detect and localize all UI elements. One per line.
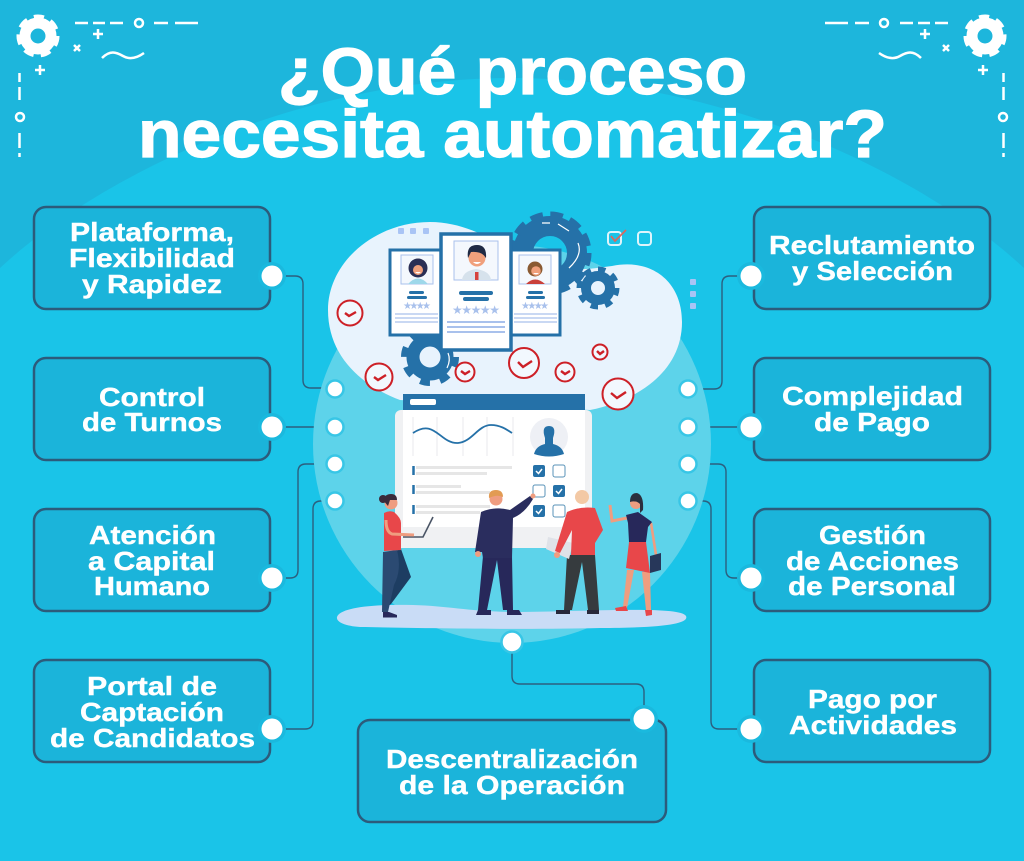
panel: Gestión de Acciones de Personal: Gestión	[819, 520, 926, 550]
profile card: left: ★★★★	[403, 301, 431, 312]
icon: medium gear	[579, 269, 617, 307]
panel: Reclutamiento y Selección: y Selección	[792, 256, 953, 286]
illustration blob	[328, 222, 682, 410]
panel: Atención a Capital Humano: Atención	[89, 520, 216, 550]
person: man in red sweater	[546, 490, 603, 614]
panel: Control de Turnos: Control	[99, 382, 205, 412]
title: ¿Qué proceso	[278, 34, 747, 108]
icon: large gear	[512, 215, 588, 291]
person: woman with laptop	[379, 494, 433, 618]
panel: Complejidad de Pago: de Pago	[814, 407, 930, 437]
panel: Plataforma, Flexibilidad y Rapidez: Plataforma,	[70, 217, 234, 247]
panel: Gestión de Acciones de Personal: de Acciones	[786, 546, 959, 576]
panel: Plataforma, Flexibilidad y Rapidez: Flexibilidad	[69, 243, 235, 273]
panel: Portal de Captación de Candidatos: Portal de	[87, 671, 217, 701]
profile card: centre: ★★★★★	[452, 303, 500, 317]
corner decoration: top left	[16, 17, 198, 157]
panel: Plataforma, Flexibilidad y Rapidez	[34, 207, 270, 309]
panel: Descentralización de la Operación: Descentralización	[386, 744, 638, 774]
person: woman in red skirt	[610, 493, 661, 616]
connector dots: box side	[258, 262, 765, 743]
checkboxes	[533, 465, 565, 517]
panel: Gestión de Acciones de Personal: de Personal	[788, 571, 956, 601]
panel: Atención a Capital Humano: a Capital	[88, 546, 215, 576]
avatar icon	[530, 418, 568, 456]
connector dots: illustration side	[326, 380, 696, 652]
panel: Reclutamiento y Selección: Reclutamiento	[769, 230, 975, 260]
panel: Complejidad de Pago	[754, 358, 990, 460]
panel: Pago por Actividades: Actividades	[789, 710, 957, 740]
profile card: left	[390, 250, 441, 335]
panel: Pago por Actividades: Pago por	[808, 684, 937, 714]
panel: Atención a Capital Humano	[34, 509, 270, 611]
person: man in navy suit	[475, 490, 536, 615]
panel: Portal de Captación de Candidatos: de Candidatos	[50, 723, 255, 753]
title	[138, 34, 887, 172]
panel: Control de Turnos: de Turnos	[82, 407, 222, 437]
panel: Gestión de Acciones de Personal	[754, 509, 990, 611]
panel: Descentralización de la Operación: de la Operación	[399, 770, 625, 800]
profile card: right	[511, 250, 560, 335]
panel: Atención a Capital Humano: Humano	[94, 571, 210, 601]
icon: lower gear	[404, 331, 456, 383]
dashboard screen	[395, 394, 592, 548]
profile card: centre	[441, 234, 511, 350]
small squares decoration	[398, 228, 696, 309]
panel: Portal de Captación de Candidatos: Captación	[80, 697, 224, 727]
panel: Complejidad de Pago: Complejidad	[782, 381, 963, 411]
panel: Portal de Captación de Candidatos	[34, 660, 270, 762]
connector lines	[272, 276, 751, 729]
panel: Plataforma, Flexibilidad y Rapidez: y Rapidez	[82, 269, 222, 299]
title: necesita automatizar?	[138, 97, 887, 172]
list rows	[414, 466, 512, 514]
line chart	[413, 417, 513, 456]
panel: Reclutamiento y Selección	[754, 207, 990, 309]
panel: Pago por Actividades	[754, 660, 990, 762]
corner decoration: top right	[825, 17, 1007, 157]
illustration backdrop circle	[313, 245, 711, 643]
profile card: right: ★★★★	[521, 301, 549, 312]
clock check icons	[338, 300, 634, 410]
top checkboxes	[608, 230, 651, 245]
panel: Descentralización de la Operación	[358, 720, 666, 822]
panel: Control de Turnos	[34, 358, 270, 460]
ground shape	[337, 605, 686, 629]
